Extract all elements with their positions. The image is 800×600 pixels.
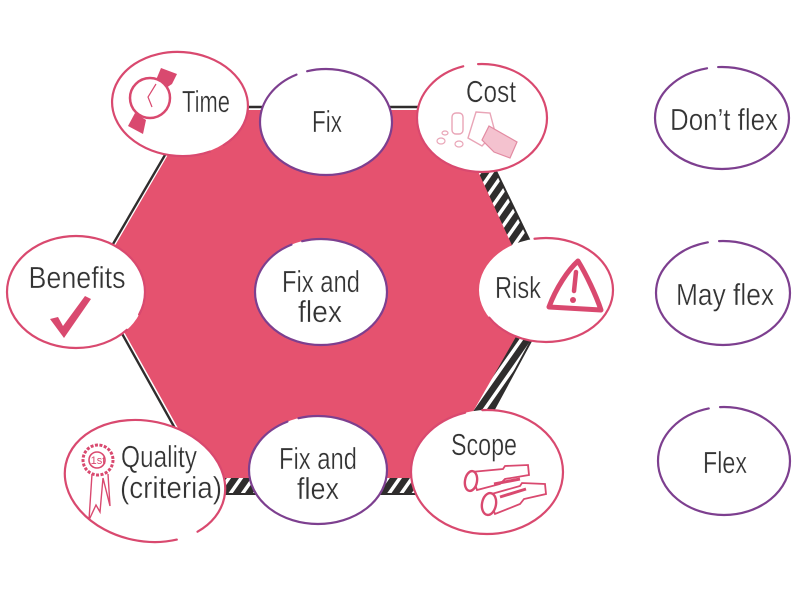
label: Risk: Risk	[495, 270, 541, 305]
legend: Flex	[658, 407, 790, 515]
bubble: Quality (criteria)	[53, 405, 237, 557]
legend: Don't flex	[655, 67, 789, 169]
label: Time: Time	[182, 84, 230, 119]
label: Don't flex: Don’t flex	[670, 102, 778, 137]
label: Fix and flex	[279, 441, 357, 506]
label: Quality (criteria): (criteria)	[120, 470, 222, 505]
label: Fix and flex: Fix and	[282, 264, 360, 299]
icon: watch	[128, 68, 177, 134]
legend: May flex	[656, 241, 790, 345]
bubble: Risk	[479, 238, 613, 342]
label: Fix and flex: Fix and	[279, 441, 357, 476]
label: Quality (criteria): Quality	[121, 439, 197, 474]
bubble: Fix and flex bottom	[249, 416, 387, 524]
icon: first place rosette: 1st	[91, 455, 105, 467]
icon: first place rosette	[83, 445, 113, 520]
label: Fix and flex	[282, 264, 360, 329]
icon: binoculars	[463, 465, 546, 516]
label: Scope: Scope	[451, 427, 517, 462]
bubble: Fix and flex centre	[255, 239, 387, 345]
label: Flex: Flex	[703, 445, 747, 480]
bubble: Fix	[260, 69, 392, 175]
bubble: Benefits	[7, 236, 145, 348]
hexagon hatched edge, right and bottom	[204, 107, 556, 494]
label: Fix and flex: flex	[297, 471, 339, 506]
hexagon thin outline, top and left	[92, 107, 450, 482]
bubble: Scope	[411, 410, 563, 534]
bubble: Cost	[417, 64, 547, 172]
label: Cost: Cost	[466, 74, 516, 109]
label: Quality (criteria)	[120, 439, 222, 505]
icon: check mark	[50, 296, 91, 338]
bubble: Time	[109, 47, 251, 161]
label: Fix and flex: flex	[298, 294, 342, 329]
hexagon	[92, 107, 556, 494]
label: May flex: May flex	[676, 277, 774, 312]
hexagon pink fill	[95, 110, 537, 478]
icon: coins and banknotes	[437, 112, 517, 158]
icon: warning triangle	[549, 261, 601, 310]
label: Fix: Fix	[312, 104, 342, 139]
label: Benefits: Benefits	[28, 260, 126, 295]
